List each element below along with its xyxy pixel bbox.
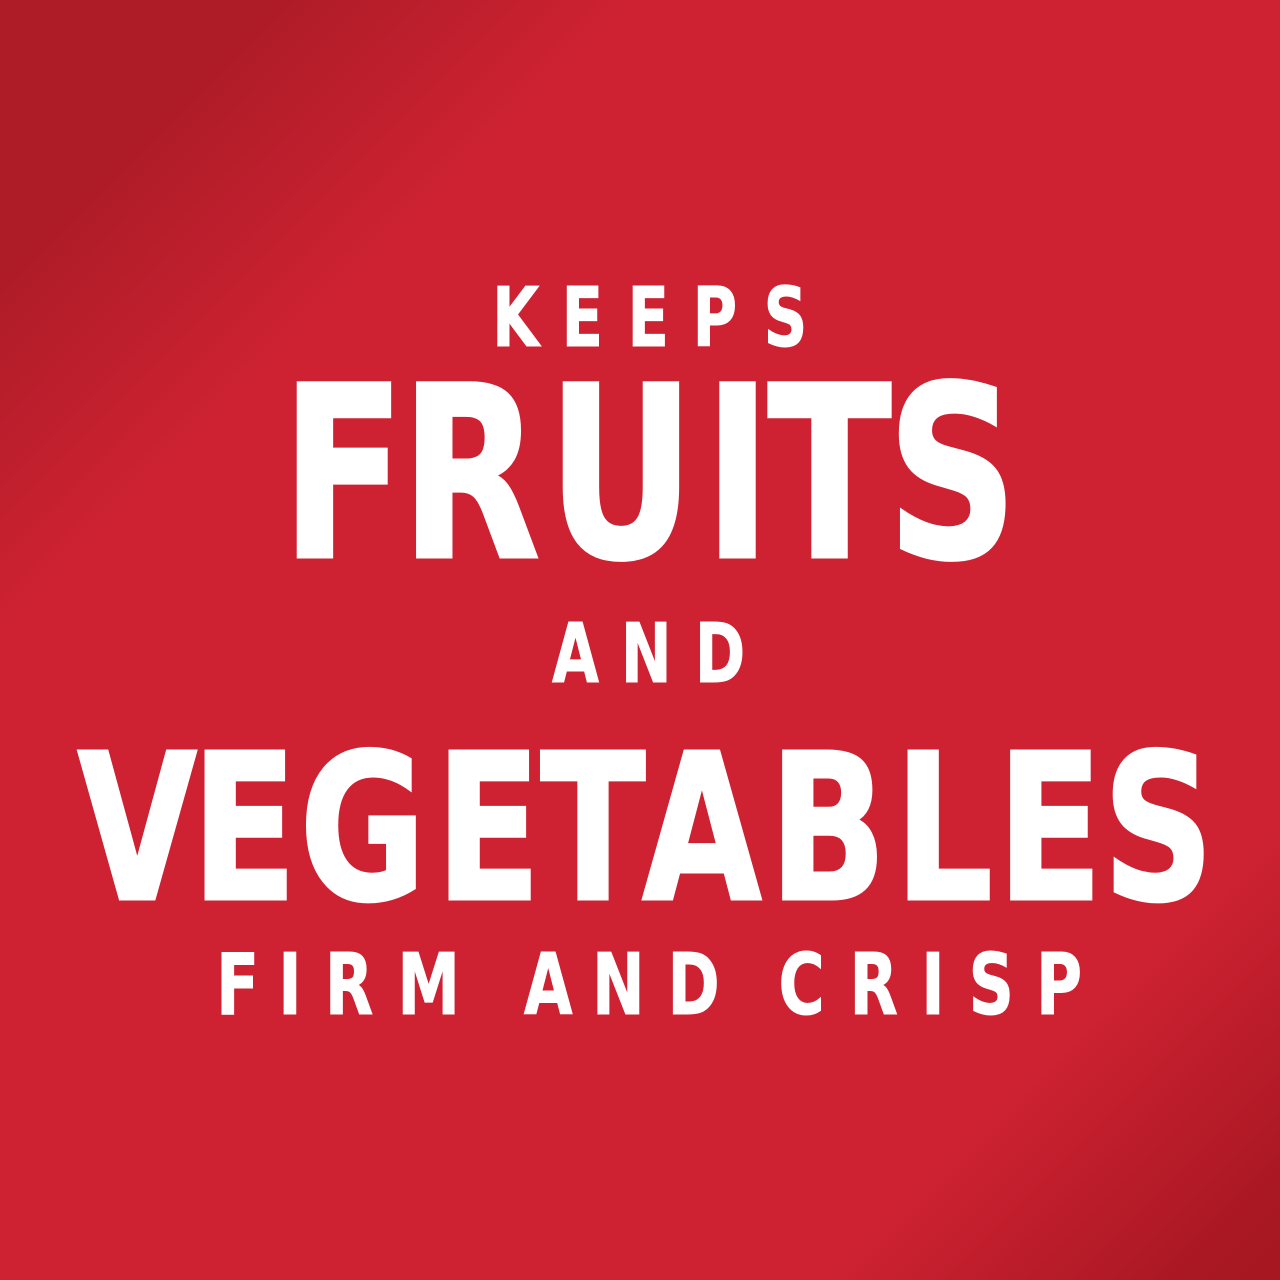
text: VEGETABLES: VEGETABLES <box>78 711 1214 947</box>
text: KEEPS: KEEPS <box>492 271 807 366</box>
headline <box>78 271 1214 1034</box>
text: AND: AND <box>552 607 745 702</box>
text: FIRM AND CRISP: FIRM AND CRISP <box>216 936 1082 1034</box>
text: FRUITS: FRUITS <box>281 336 1018 614</box>
